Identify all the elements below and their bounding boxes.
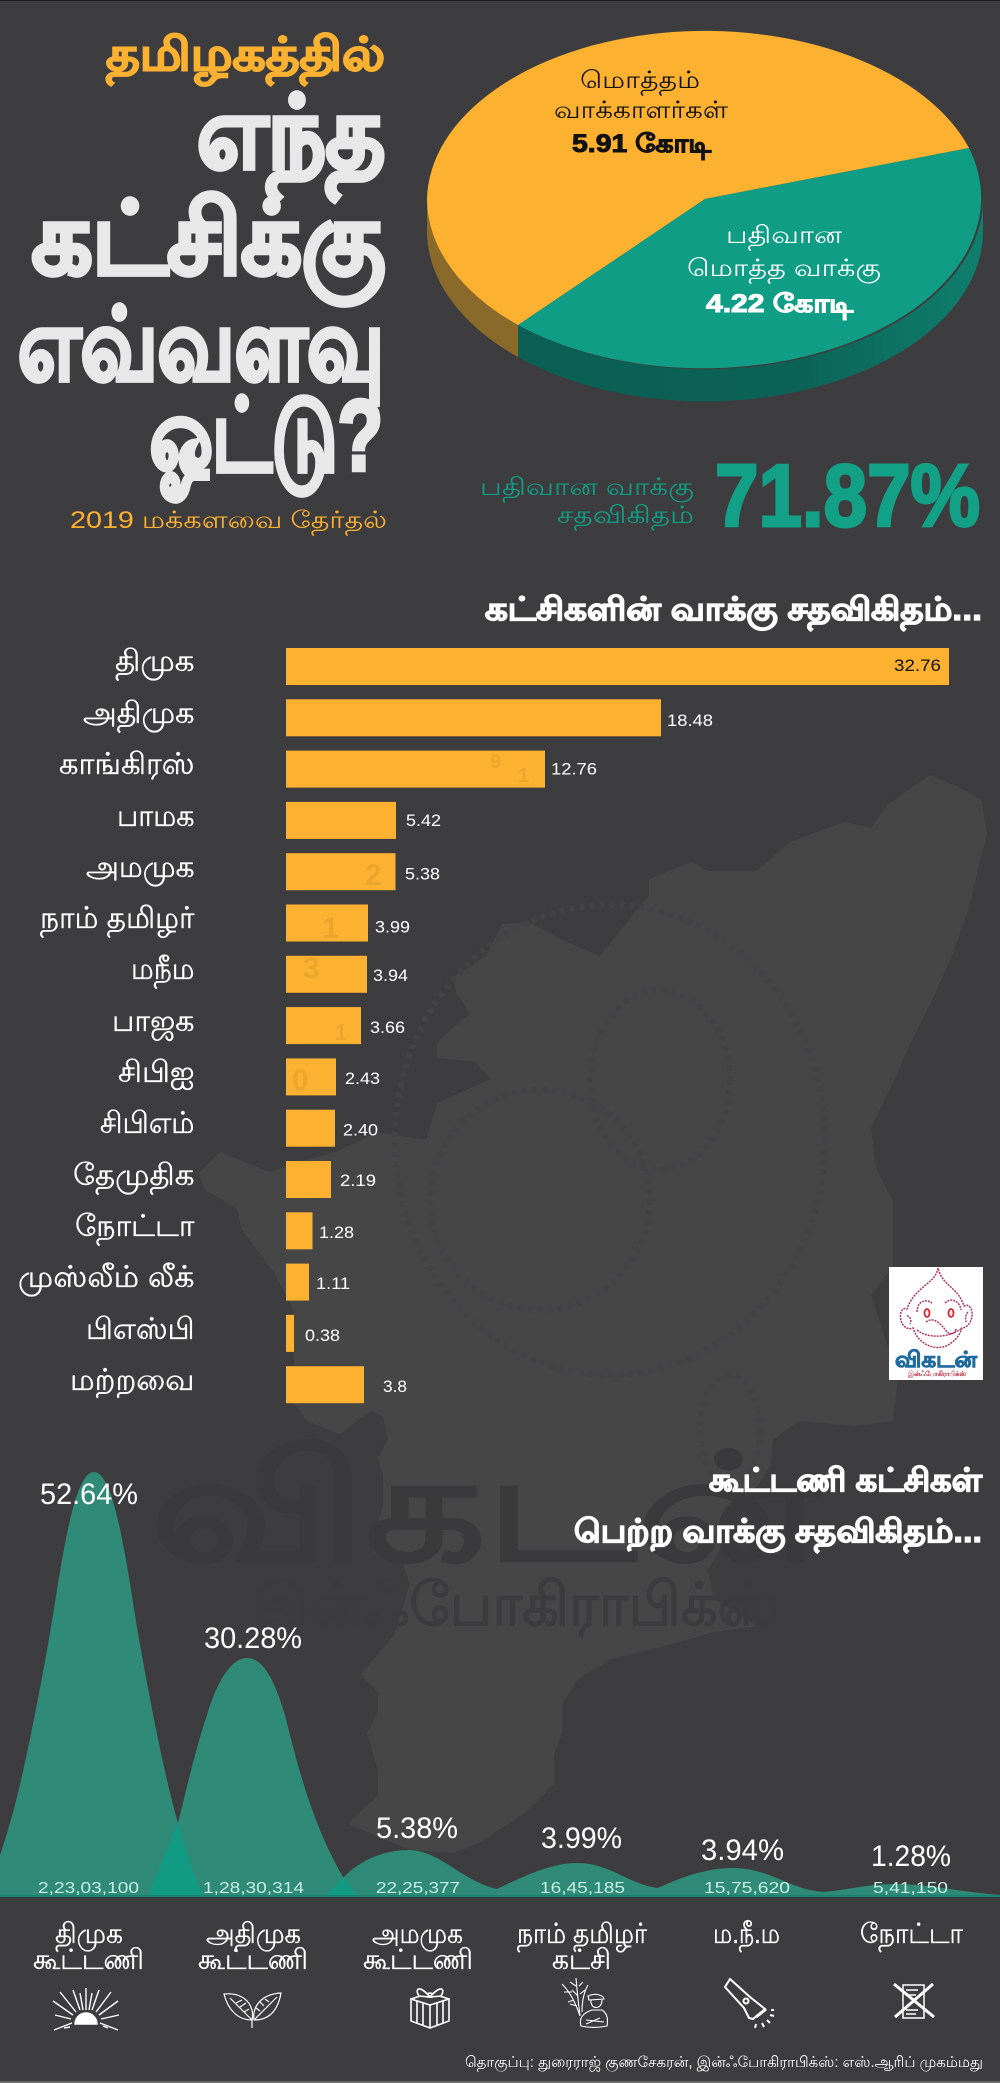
pie chart: voters (427, 31, 983, 401)
alliance percentages: 52.64% (40, 1478, 138, 1511)
pie label: total voters: வாக்காளர்கள் (554, 97, 728, 124)
icon: torch (725, 1979, 774, 2028)
pie label: total voters: மொத்தம் (580, 67, 700, 96)
area chart: alliance vote share (0, 1472, 1000, 1897)
alliance names: நாம் தமிழர் (517, 1918, 647, 1952)
pie label: total voters: 5.91 கோடி (572, 130, 712, 160)
icon: NOTA cross (894, 1984, 934, 2018)
watermark digits over bars: 1 (335, 1020, 347, 1045)
bar: DMK: 32.76 (894, 656, 941, 675)
bar: DMDK (73, 1159, 376, 1198)
bar: BJP (112, 1005, 405, 1044)
alliance vote counts (38, 1880, 948, 1897)
alliance vote counts: 2,23,03,100 (38, 1880, 139, 1897)
bar: AMMK: அமமுக (86, 851, 194, 886)
bar: CPI: 2.43 (345, 1069, 380, 1088)
heading: alliance vote share: பெற்ற வாக்கு சதவிகிதம்... (574, 1513, 982, 1553)
bar: NOTA (75, 1210, 354, 1249)
bar: NOTA: 1.28 (319, 1223, 354, 1242)
bar: CPM: சிபிஎம் (100, 1107, 194, 1140)
title (18, 28, 385, 502)
alliance names: அதிமுக (206, 1918, 301, 1952)
bar: PMK: பாமக (117, 800, 194, 833)
alliance vote counts: 5,41,150 (873, 1880, 948, 1897)
credits: தொகுப்பு: துரைராஜ் குணசேகரன், இன்ஃபோகிராபிக்ஸ்: எஸ்.ஆரிப் முகம்மது (465, 2054, 983, 2072)
pie label: votes polled: 4.22 கோடி (706, 290, 854, 320)
bar: CPI: சிபிஐ (118, 1056, 194, 1090)
background watermark: Vikatan wordmark: இன்ஃபோகிராபிக்ஸ் (252, 1571, 779, 1644)
icon: rising sun (53, 1988, 119, 2030)
alliance names (33, 1918, 963, 1975)
watermark digits over bars: 0 (292, 1064, 309, 1097)
alliance names: திமுக (55, 1918, 123, 1952)
watermark digits over bars (292, 751, 529, 1097)
watermark digits over bars: 3 (303, 952, 320, 985)
alliance names: கூட்டணி (363, 1944, 473, 1975)
alliance percentages: 5.38% (376, 1812, 458, 1845)
watermark digits over bars: 1 (322, 912, 339, 945)
turnout caption: சதவிகிதம் (557, 502, 694, 531)
turnout caption: பதிவான வாக்கு (480, 474, 694, 503)
bar: MNM: மநீம (131, 953, 194, 989)
bar: PMK (117, 800, 441, 839)
bar: Muslim League: 1.11 (316, 1274, 350, 1293)
bar: MNM: 3.94 (373, 966, 408, 985)
bar: NOTA: நோட்டா (75, 1210, 195, 1246)
bar: Naam Tamilar: நாம் தமிழர் (40, 902, 195, 938)
alliance vote counts: 15,75,620 (704, 1880, 790, 1897)
alliance percentages: 3.99% (541, 1822, 622, 1855)
Vikatan logo (889, 1267, 983, 1380)
bar: AMMK: 5.38 (405, 864, 440, 884)
bar: CPM (100, 1107, 378, 1147)
alliance names: கூட்டணி (198, 1944, 308, 1975)
alliance percentages: 1.28% (871, 1840, 951, 1873)
heading: party vote share: கட்சிகளின் வாக்கு சதவிகிதம்... (485, 591, 982, 631)
watermark digits over bars: 9 (490, 751, 501, 773)
bar: DMK: திமுக (115, 645, 194, 681)
alliance names: நோட்டா (860, 1918, 963, 1952)
bar: DMK (115, 645, 949, 685)
background watermark: Vikatan wordmark (150, 1424, 822, 1644)
bar: MNM (131, 953, 408, 993)
bar: Muslim League (18, 1261, 350, 1301)
bar: Congress: 12.76 (551, 760, 597, 778)
heading: alliance vote share (574, 1462, 983, 1553)
icon: farmer with sugarcane (562, 1978, 607, 2028)
heading: alliance vote share: கூட்டணி கட்சிகள் (709, 1462, 983, 1498)
pie label: total voters (554, 67, 728, 160)
logo eyes (924, 1309, 954, 1317)
turnout caption (480, 474, 694, 531)
logo wordmark: விகடன் (895, 1347, 978, 1372)
alliance names: கட்சி (552, 1944, 611, 1975)
title line 3: எவ்வளவு (18, 289, 384, 405)
bar: Congress: காங்கிரஸ் (59, 748, 194, 781)
bar: Congress (59, 748, 597, 788)
bar: BJP: பாஜக (112, 1005, 194, 1041)
pie label: votes polled (687, 222, 881, 320)
bar: AIADMK: 18.48 (667, 711, 713, 730)
alliance percentages: 3.94% (701, 1834, 784, 1867)
bar: Naam Tamilar: 3.99 (375, 918, 410, 936)
icon: two leaves (224, 1993, 281, 2028)
bar: Others: 3.8 (383, 1377, 407, 1396)
bar: PMK: 5.42 (406, 811, 441, 830)
icon: gift box (411, 1989, 449, 2028)
subtitle: 2019 மக்களவை தேர்தல் (70, 507, 387, 536)
bar: DMDK: 2.19 (340, 1171, 376, 1190)
bar: Muslim League: முஸ்லீம் லீக் (18, 1261, 194, 1296)
watermark digits over bars: 1 (518, 765, 529, 787)
watermark digits over bars: 2 (365, 859, 382, 892)
bar: BJP: 3.66 (370, 1018, 405, 1037)
bar: CPI (118, 1056, 380, 1095)
bar: AMMK (86, 851, 440, 890)
bar: CPM: 2.40 (343, 1120, 378, 1140)
background map of Tamil Nadu (199, 775, 987, 1853)
bar: AIADMK: அதிமுக (83, 697, 194, 733)
title line 2: கட்சிக்கு (32, 183, 385, 306)
background watermark: Vikatan wordmark: விகடன் (150, 1424, 822, 1592)
bar: DMDK: தேமுதிக (73, 1159, 194, 1195)
pie label: votes polled: பதிவான (726, 222, 843, 251)
alliance percentages (40, 1478, 951, 1873)
bar: Others: மற்றவை (70, 1364, 194, 1398)
title kicker: தமிழகத்தில் (106, 28, 385, 86)
alliance vote counts: 1,28,30,314 (203, 1880, 304, 1897)
pie label: votes polled: மொத்த வாக்கு (687, 255, 881, 284)
alliance names: அமமுக (372, 1918, 463, 1952)
logo subtitle: இன்ஃபோகிராபிக்ஸ் (907, 1370, 966, 1378)
bar: BSP (86, 1313, 340, 1352)
bar: BSP: பிஎஸ்பி (86, 1313, 194, 1346)
bar: BSP: 0.38 (305, 1326, 340, 1345)
title line 4: ஓட்டு? (150, 380, 383, 502)
background watermark: circular number ornament (395, 905, 825, 1485)
bar: AIADMK (83, 697, 713, 736)
alliance names: ம.நீ.ம (713, 1918, 780, 1952)
bar chart: party vote share (18, 645, 949, 1403)
bar: Others (70, 1364, 407, 1403)
bar: Naam Tamilar (40, 902, 410, 942)
logo face (900, 1268, 972, 1348)
alliance vote counts: 16,45,185 (540, 1880, 625, 1897)
alliance percentages: 30.28% (204, 1622, 302, 1655)
alliance vote counts: 22,25,377 (376, 1880, 460, 1897)
alliance names: கூட்டணி (33, 1944, 144, 1975)
title line 1: எந்த (197, 77, 385, 203)
